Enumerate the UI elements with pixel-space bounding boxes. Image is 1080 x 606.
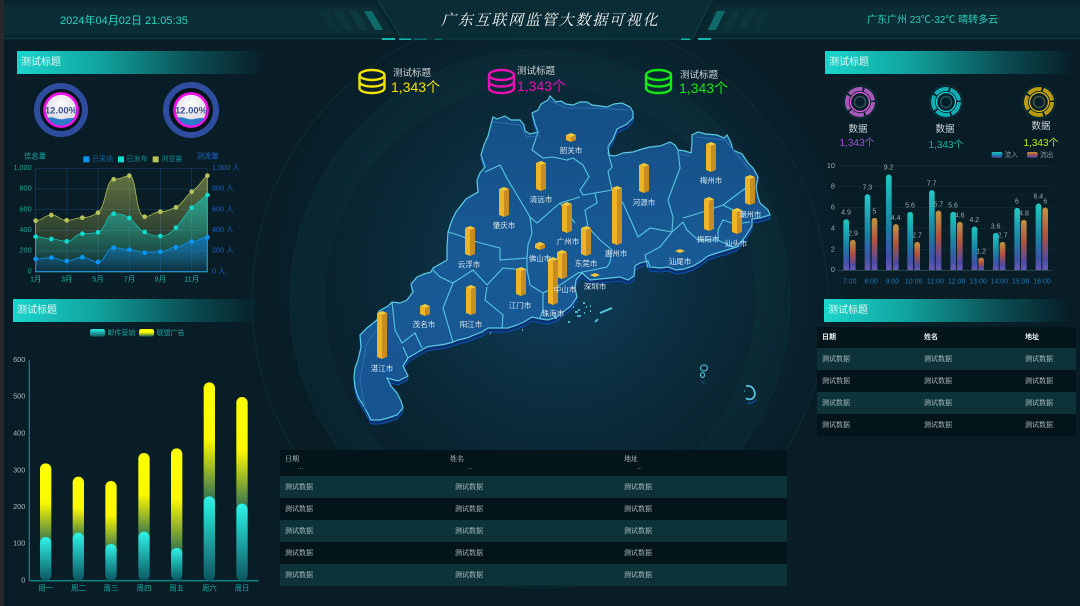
table: center: 测试数据 <box>285 483 313 491</box>
bar chart: weekly stacked: 周六 <box>202 584 217 593</box>
line chart: 7月 <box>124 274 135 283</box>
header <box>4 0 1080 40</box>
right grouped bar chart: 8:00 <box>864 279 878 286</box>
map shadow layer <box>354 100 770 424</box>
right ring icon 1: 数据 <box>848 123 868 135</box>
gauge 1 <box>37 86 85 134</box>
city labels: 梅州市 <box>700 175 723 185</box>
stat: yellow: 1,343个 <box>391 79 440 95</box>
table header: 日期 <box>822 334 836 341</box>
right grouped bar chart: 7:00 <box>843 279 857 286</box>
table header <box>817 327 1076 348</box>
city labels: 东莞市 <box>575 258 598 268</box>
gauge 1: 12.00% <box>45 106 78 116</box>
line chart axis labels: 0 <box>28 266 32 275</box>
bar value labels: 6.4 <box>1033 194 1043 201</box>
city labels: 惠州市 <box>605 248 628 258</box>
bar chart: weekly stacked: 500 <box>13 392 25 401</box>
table: right: 测试数据 <box>822 421 850 429</box>
bar chart legend: 流入 <box>1005 150 1018 159</box>
city labels: 韶关市 <box>560 145 583 155</box>
table header: 姓名 <box>924 334 938 341</box>
bar value labels: 7.3 <box>862 184 872 191</box>
bar chart: weekly stacked: 600 <box>13 355 25 364</box>
column: 惠州 <box>612 186 622 245</box>
column: 江门 <box>516 267 526 296</box>
table: right: 测试数据 <box>924 421 952 429</box>
left edge strip <box>0 0 4 606</box>
city labels <box>371 145 762 373</box>
city labels: 珠海市 <box>542 308 565 318</box>
table: center: 测试数据 <box>285 571 313 579</box>
table: center: 测试数据 <box>455 571 483 579</box>
city labels: 茂名市 <box>413 319 436 329</box>
right grouped bar chart: 12:00 <box>948 279 966 286</box>
bar chart legend: 联盟广告 <box>157 328 185 337</box>
right grouped bar chart: 2 <box>831 244 835 253</box>
column: 潮州 <box>745 175 755 205</box>
weather: 广东广州 23℃-32℃ 晴转多云 <box>867 15 998 26</box>
table: right <box>817 327 1076 436</box>
bar value labels: 5.6 <box>948 202 958 209</box>
area: published <box>36 195 207 272</box>
right grouped bar chart: 14:00 <box>991 279 1008 286</box>
bar chart: weekly stacked <box>13 355 259 593</box>
table: center: 测试数据 <box>455 483 483 491</box>
table: center: 测试数据 <box>624 505 652 513</box>
right grouped bar chart: 15:00 <box>1012 279 1030 286</box>
city labels: 潮州市 <box>739 209 762 219</box>
bar chart legend <box>992 150 1053 159</box>
column: 梅州 <box>706 142 716 172</box>
bar chart: weekly stacked: 300 <box>13 465 25 474</box>
right grouped bar chart: 8 <box>831 182 835 191</box>
right ring icon 1 <box>839 86 876 149</box>
bar value labels: 2.7 <box>998 233 1008 240</box>
bar value labels: 4.4 <box>891 215 901 222</box>
table: center: 测试数据 <box>285 549 313 557</box>
table header: ... <box>298 463 303 471</box>
table header: ... <box>467 463 472 471</box>
line chart legend: 已采纳 <box>92 154 113 163</box>
line chart: 3月 <box>61 274 72 283</box>
right grouped bar chart <box>827 150 1053 286</box>
line chart legend: 浏览量 <box>161 154 182 163</box>
line chart axis labels: 600 <box>19 204 32 213</box>
right ring icon 2: 1,343个 <box>928 139 964 151</box>
line chart: 5月 <box>92 274 104 283</box>
area: pageviews <box>36 176 207 272</box>
line chart axis labels <box>13 151 46 275</box>
table: right: 测试数据 <box>924 377 952 385</box>
line chart axis labels: 200 <box>19 246 32 255</box>
city labels: 佛山市 <box>529 253 552 263</box>
right ring icon 2: 数据 <box>935 123 955 135</box>
table: center: 测试数据 <box>624 527 652 535</box>
bar chart: weekly stacked: 0 <box>21 575 25 584</box>
column: 揭阳 <box>704 197 714 231</box>
city labels: 江门市 <box>509 300 532 310</box>
bar value labels: 5.7 <box>933 201 943 208</box>
panel heading: left top <box>17 51 265 74</box>
bar value labels: 2.9 <box>848 231 858 238</box>
line chart: 1,000 人 <box>212 163 240 172</box>
column: 韶关 <box>566 133 576 142</box>
right grouped bar chart: 6 <box>831 203 835 212</box>
gauge 2: 12.00% <box>175 106 208 116</box>
stat: magenta: 测试标题 <box>517 65 556 77</box>
left slashes <box>320 11 383 30</box>
right grouped bar chart: 0 <box>831 265 835 274</box>
map of Guangdong <box>354 96 770 420</box>
table: center: 测试数据 <box>455 527 483 535</box>
table header: 地址 <box>1025 334 1039 341</box>
line chart: 600 人 <box>212 204 234 213</box>
city labels: 汕头市 <box>725 238 748 248</box>
line chart: 11月 <box>184 274 199 283</box>
bar chart: weekly stacked: 周五 <box>169 584 184 593</box>
city labels: 中山市 <box>554 284 577 294</box>
column: 广州 <box>562 202 572 233</box>
gauge 2 <box>166 85 216 135</box>
city labels: 肇庆市 <box>493 220 516 230</box>
table: center: 测试数据 <box>624 549 652 557</box>
right grouped bar chart: 13:00 <box>969 279 987 286</box>
line chart: 1月 <box>30 274 41 283</box>
panel heading: right bottom: 测试标题 <box>828 305 868 316</box>
stat: magenta <box>489 65 566 94</box>
table: right: 测试数据 <box>924 399 952 407</box>
line chart axis labels: 信息量 <box>24 151 46 160</box>
right ring icon 2 <box>928 86 964 151</box>
bar value labels: 3.6 <box>991 223 1001 230</box>
line chart: 800 人 <box>212 184 234 193</box>
city labels: 云浮市 <box>458 259 481 269</box>
stat: green <box>646 69 728 96</box>
date time: 2024年04月02日 21:05:35 <box>60 15 188 27</box>
bar value labels: 4.9 <box>841 210 851 217</box>
table: center: 测试数据 <box>285 527 313 535</box>
line chart legend <box>83 154 182 163</box>
column: 佛山 <box>535 242 545 250</box>
header accents <box>382 38 711 40</box>
line chart: 400 人 <box>212 225 234 234</box>
bar chart legend: 邮件营销 <box>107 328 135 337</box>
table header: 姓名 <box>450 455 464 463</box>
area: collected <box>36 237 207 272</box>
title: 广东互联网监管大数据可视化 <box>441 13 659 29</box>
table header <box>280 450 787 476</box>
islands <box>490 303 756 403</box>
right grouped bar chart: 11:00 <box>927 279 944 286</box>
bar value labels: 5.6 <box>905 202 915 209</box>
table: center: 测试数据 <box>624 483 652 491</box>
column: 深圳 <box>590 273 600 277</box>
line chart axis labels: 400 <box>19 225 32 234</box>
city labels: 清远市 <box>530 194 553 204</box>
table: center <box>280 450 787 586</box>
panel heading: left bottom: 测试标题 <box>17 305 57 316</box>
panel heading: right top: 测试标题 <box>829 57 869 68</box>
right grouped bar chart: 16:00 <box>1033 279 1051 286</box>
right slashes <box>708 11 770 30</box>
bar chart: weekly stacked: 200 <box>13 502 25 511</box>
bar value labels: 4.2 <box>969 217 979 224</box>
stat: yellow <box>360 67 440 95</box>
table: center: 测试数据 <box>285 505 313 513</box>
column: 中山 <box>557 250 567 279</box>
right ring icon 3 <box>1022 86 1059 149</box>
bar chart: weekly stacked: 周二 <box>71 584 86 593</box>
bar value labels: 6 <box>1015 198 1019 205</box>
city labels: 河源市 <box>633 197 656 207</box>
right grouped bar chart: 10:00 <box>905 279 923 286</box>
right grouped bar chart: 10 <box>827 161 835 170</box>
table: center: 测试数据 <box>455 505 483 513</box>
table header: 日期 <box>285 455 299 463</box>
bar chart: weekly stacked: 周四 <box>137 584 151 593</box>
stat: green: 测试标题 <box>680 69 719 81</box>
table: right: 测试数据 <box>924 355 952 363</box>
line chart legend: 已发布 <box>127 154 148 163</box>
table header: ... <box>637 463 642 471</box>
bar chart: weekly stacked: 400 <box>13 428 25 437</box>
bar chart: weekly stacked: 周三 <box>104 584 118 593</box>
table: right: 测试数据 <box>1025 399 1053 407</box>
bar chart legend: 流出 <box>1040 150 1053 159</box>
bar value labels: 1.2 <box>976 248 986 255</box>
line chart axis labels: 1,000 <box>13 163 32 172</box>
line chart axis labels: 800 <box>19 184 32 193</box>
table: center: 测试数据 <box>624 571 652 579</box>
city labels: 阳江市 <box>460 319 483 329</box>
line chart: 200 人 <box>212 246 234 255</box>
stat: yellow: 测试标题 <box>393 67 432 79</box>
bar chart: weekly stacked: 周一 <box>38 584 54 593</box>
bar value labels: 4.8 <box>1019 211 1029 218</box>
table: right: 测试数据 <box>822 355 850 363</box>
column: 湛江 <box>377 311 387 359</box>
column: 河源 <box>639 163 649 193</box>
column: 阳江 <box>466 285 476 315</box>
line chart: 9月 <box>155 274 166 283</box>
bar chart legend <box>90 328 185 337</box>
city labels: 湛江市 <box>371 363 394 373</box>
column: 汕头 <box>732 208 742 234</box>
table: right: 测试数据 <box>1025 421 1053 429</box>
line chart: 测流量 <box>197 151 219 160</box>
bar value labels <box>841 165 1047 255</box>
table: center: 测试数据 <box>455 549 483 557</box>
map columns <box>377 133 755 359</box>
table: right: 测试数据 <box>1025 377 1053 385</box>
column: 云浮 <box>465 226 475 256</box>
right ring icon 1: 1,343个 <box>839 137 875 149</box>
line chart: 0 人 <box>212 266 226 275</box>
bar value labels: 4.6 <box>955 213 965 220</box>
stat: green: 1,343个 <box>679 80 728 96</box>
bar chart: weekly stacked: 100 <box>13 539 25 548</box>
column: 茂名 <box>420 304 430 316</box>
right grouped bar chart: 4 <box>831 223 835 232</box>
bar chart: weekly stacked: 周日 <box>235 584 249 593</box>
stat: magenta: 1,343个 <box>517 78 566 94</box>
right grouped bar chart: 9:00 <box>886 279 899 286</box>
right ring icon 3: 数据 <box>1031 120 1051 132</box>
panel heading: right top <box>825 51 1075 74</box>
panel heading: left top: 测试标题 <box>21 57 61 68</box>
city labels: 广州市 <box>557 236 580 246</box>
bar value labels: 7.7 <box>927 180 937 187</box>
column: 汕尾 <box>675 249 685 253</box>
table header: 地址 <box>624 455 638 463</box>
bar value labels: 5 <box>872 209 876 216</box>
panel heading: left bottom <box>13 299 260 322</box>
city labels: 揭阳市 <box>697 234 720 244</box>
bar value labels: 2.7 <box>912 233 922 240</box>
right ring icon 3: 1,343个 <box>1023 137 1059 149</box>
panel heading: right bottom <box>824 299 1070 322</box>
column: 清远 <box>536 161 546 191</box>
column: 珠海 <box>548 257 558 305</box>
column: 肇庆 <box>499 187 509 217</box>
table: right: 测试数据 <box>822 399 850 407</box>
table: right: 测试数据 <box>822 377 850 385</box>
column: 东莞 <box>581 226 591 256</box>
bar value labels: 6 <box>1043 198 1047 205</box>
line chart <box>13 151 240 337</box>
table: right: 测试数据 <box>1025 355 1053 363</box>
bar value labels: 9.2 <box>884 165 894 172</box>
city labels: 深圳市 <box>584 281 607 291</box>
city labels: 汕尾市 <box>669 256 692 266</box>
